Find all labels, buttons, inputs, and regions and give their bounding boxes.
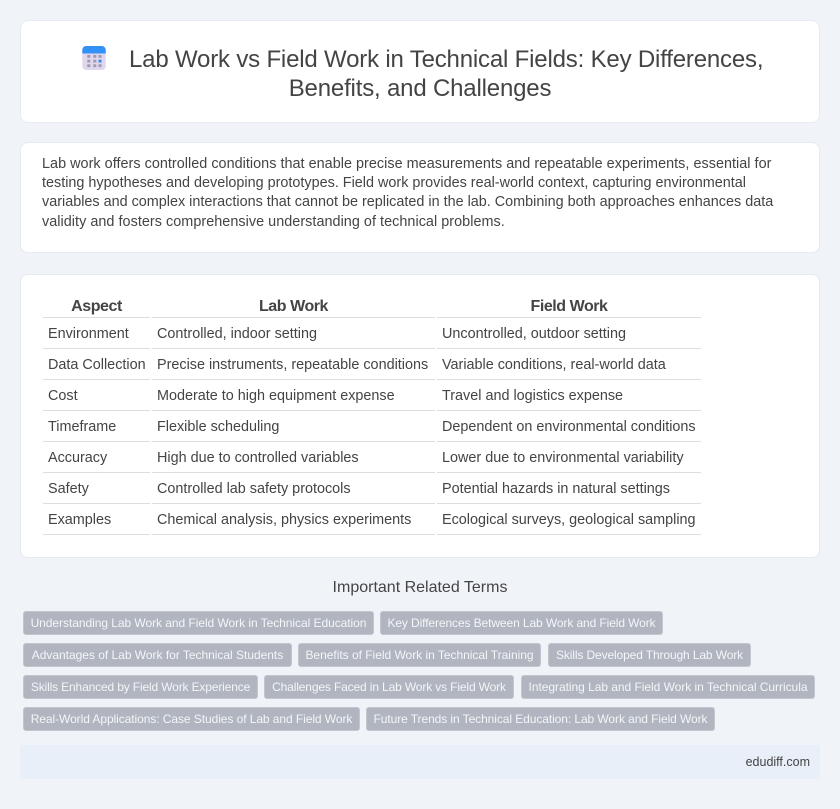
panel: comparison table bbox=[20, 274, 820, 558]
tag: Skills Enhanced by Field Work Experience bbox=[31, 680, 250, 694]
row: environment: Uncontrolled, outdoor setting bbox=[442, 326, 626, 342]
tag: Benefits of Field Work in Technical Training bbox=[305, 648, 534, 662]
row: environment bbox=[48, 326, 626, 342]
text block: introduction: Lab work offers controlled conditions that enable precise measurements and repeatable experiments, essential for bbox=[42, 156, 771, 172]
row: accuracy: Lower due to environmental variability bbox=[442, 450, 684, 466]
tag bbox=[23, 611, 374, 635]
row: timeframe: Dependent on environmental conditions bbox=[442, 419, 696, 435]
tag: Integrating Lab and Field Work in Technical Curricula bbox=[529, 680, 807, 694]
table header: Aspect bbox=[71, 298, 122, 315]
row: cost: Cost bbox=[48, 388, 78, 404]
row: timeframe: Timeframe bbox=[48, 419, 116, 435]
row: data collection: Precise instruments, repeatable conditions bbox=[157, 357, 428, 373]
text block: introduction: testing hypotheses and developing prototypes. Field work provides real-world context, capturing environmental bbox=[42, 175, 746, 191]
row: safety: Potential hazards in natural settings bbox=[442, 481, 670, 497]
row: environment: Environment bbox=[48, 326, 129, 342]
heading: important related terms: Important Related Terms bbox=[333, 579, 507, 596]
table header: Field Work bbox=[530, 298, 608, 315]
text block: introduction: variables and complex interactions that cannot be replicated in the lab. Combining both approaches enhances data bbox=[42, 194, 773, 210]
title: Benefits, and Challenges bbox=[289, 75, 551, 102]
tag: Key Differences Between Lab Work and Field Work bbox=[387, 616, 656, 630]
row: timeframe bbox=[48, 419, 696, 435]
row: safety bbox=[48, 481, 670, 497]
panel: introduction bbox=[20, 142, 820, 253]
row: cost: Travel and logistics expense bbox=[442, 388, 623, 404]
tag bbox=[23, 675, 258, 699]
row: safety: Safety bbox=[48, 481, 89, 497]
row: accuracy bbox=[48, 450, 684, 466]
text block: introduction bbox=[42, 156, 774, 230]
row: environment: Controlled, indoor setting bbox=[157, 326, 317, 342]
row: cost bbox=[48, 388, 623, 404]
footer bar bbox=[20, 745, 820, 779]
row: accuracy: High due to controlled variables bbox=[157, 450, 359, 466]
tag: Real-World Applications: Case Studies of Lab and Field Work bbox=[31, 712, 352, 726]
tag bbox=[366, 707, 715, 731]
tag bbox=[23, 643, 292, 667]
tag: Skills Developed Through Lab Work bbox=[556, 648, 743, 662]
tag bbox=[23, 707, 360, 731]
row: examples: Chemical analysis, physics experiments bbox=[157, 512, 411, 528]
tag bbox=[521, 675, 815, 699]
row: accuracy: Accuracy bbox=[48, 450, 107, 466]
title: Lab Work vs Field Work in Technical Fields: Key Differences, bbox=[129, 46, 763, 73]
row: data collection bbox=[48, 357, 666, 373]
row: examples: Examples bbox=[48, 512, 111, 528]
tag: Challenges Faced in Lab Work vs Field Work bbox=[272, 680, 506, 694]
row: timeframe: Flexible scheduling bbox=[157, 419, 279, 435]
tag: Understanding Lab Work and Field Work in Technical Education bbox=[31, 616, 366, 630]
row: data collection: Variable conditions, real-world data bbox=[442, 357, 666, 373]
row: cost: Moderate to high equipment expense bbox=[157, 388, 395, 404]
title bbox=[129, 46, 763, 102]
tag: Advantages of Lab Work for Technical Students bbox=[32, 648, 283, 662]
row: examples: Ecological surveys, geological sampling bbox=[442, 512, 696, 528]
row: examples bbox=[48, 512, 696, 528]
comparison table bbox=[43, 298, 701, 535]
tag bbox=[548, 643, 751, 667]
table header: Lab Work bbox=[259, 298, 328, 315]
panel: header bbox=[20, 20, 820, 123]
row: data collection: Data Collection bbox=[48, 357, 146, 373]
tag bbox=[264, 675, 514, 699]
table header bbox=[71, 298, 608, 315]
icon: calendar grid bbox=[82, 46, 106, 70]
tag bbox=[298, 643, 541, 667]
tag bbox=[380, 611, 663, 635]
tag: Future Trends in Technical Education: Lab Work and Field Work bbox=[374, 712, 707, 726]
footer source: edudiff.com bbox=[746, 755, 810, 769]
related term tags bbox=[23, 611, 815, 731]
row: safety: Controlled lab safety protocols bbox=[157, 481, 351, 497]
text block: introduction: validity and fosters comprehensive understanding of technical problems. bbox=[42, 214, 505, 230]
